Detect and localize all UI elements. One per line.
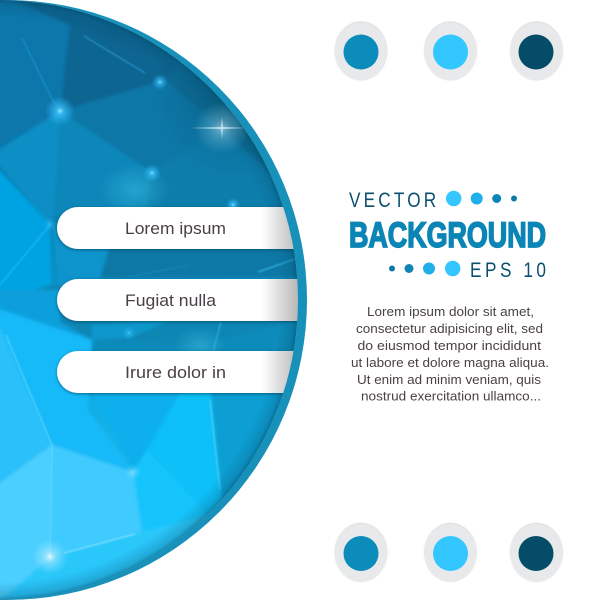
button: Lorem ipsum — [57, 207, 295, 249]
body text: nostrud exercitation ullamco... — [361, 388, 541, 404]
body text: ut labore et dolore magna aliqua. — [351, 355, 549, 370]
icon: blue circle — [335, 524, 387, 582]
button: Irure dolor in — [57, 351, 295, 393]
panel: blue polygon semicircle — [0, 0, 310, 600]
glowing facet lines — [0, 36, 298, 557]
heading: vector background — [349, 188, 546, 283]
semicircle outer rim — [0, 0, 307, 600]
heading line: BACKGROUND: BACKGROUND — [349, 216, 546, 255]
decorative dots bottom — [389, 261, 460, 276]
body text: consectetur adipisicing elit, sed — [356, 321, 543, 336]
edge vignette — [174, 80, 246, 158]
body text: Lorem ipsum dolor sit amet, — [367, 304, 534, 319]
button: Lorem ipsum: Lorem ipsum — [125, 220, 226, 238]
body text — [351, 304, 549, 404]
polygon background — [0, 0, 310, 600]
button: Fugiat nulla — [57, 279, 299, 321]
bottom circle buttons — [335, 524, 562, 582]
icon: light blue circle — [424, 524, 476, 582]
light glows — [32, 74, 240, 575]
icon: dark blue circle — [510, 524, 562, 582]
heading line: VECTOR: VECTOR — [349, 188, 436, 213]
heading line: EPS 10: EPS 10 — [470, 258, 546, 283]
button: Fugiat nulla: Fugiat nulla — [125, 292, 217, 310]
icon: light blue circle — [424, 22, 476, 80]
body text: Ut enim ad minim veniam, quis — [357, 372, 542, 387]
button: Irure dolor in: Irure dolor in — [125, 364, 226, 382]
star flare — [191, 105, 246, 150]
icon: dark blue circle — [510, 22, 562, 80]
decorative dots top — [446, 191, 517, 206]
top circle buttons — [335, 22, 562, 80]
icon: blue circle — [335, 22, 387, 80]
body text: do eiusmod tempor incididunt — [358, 338, 541, 353]
